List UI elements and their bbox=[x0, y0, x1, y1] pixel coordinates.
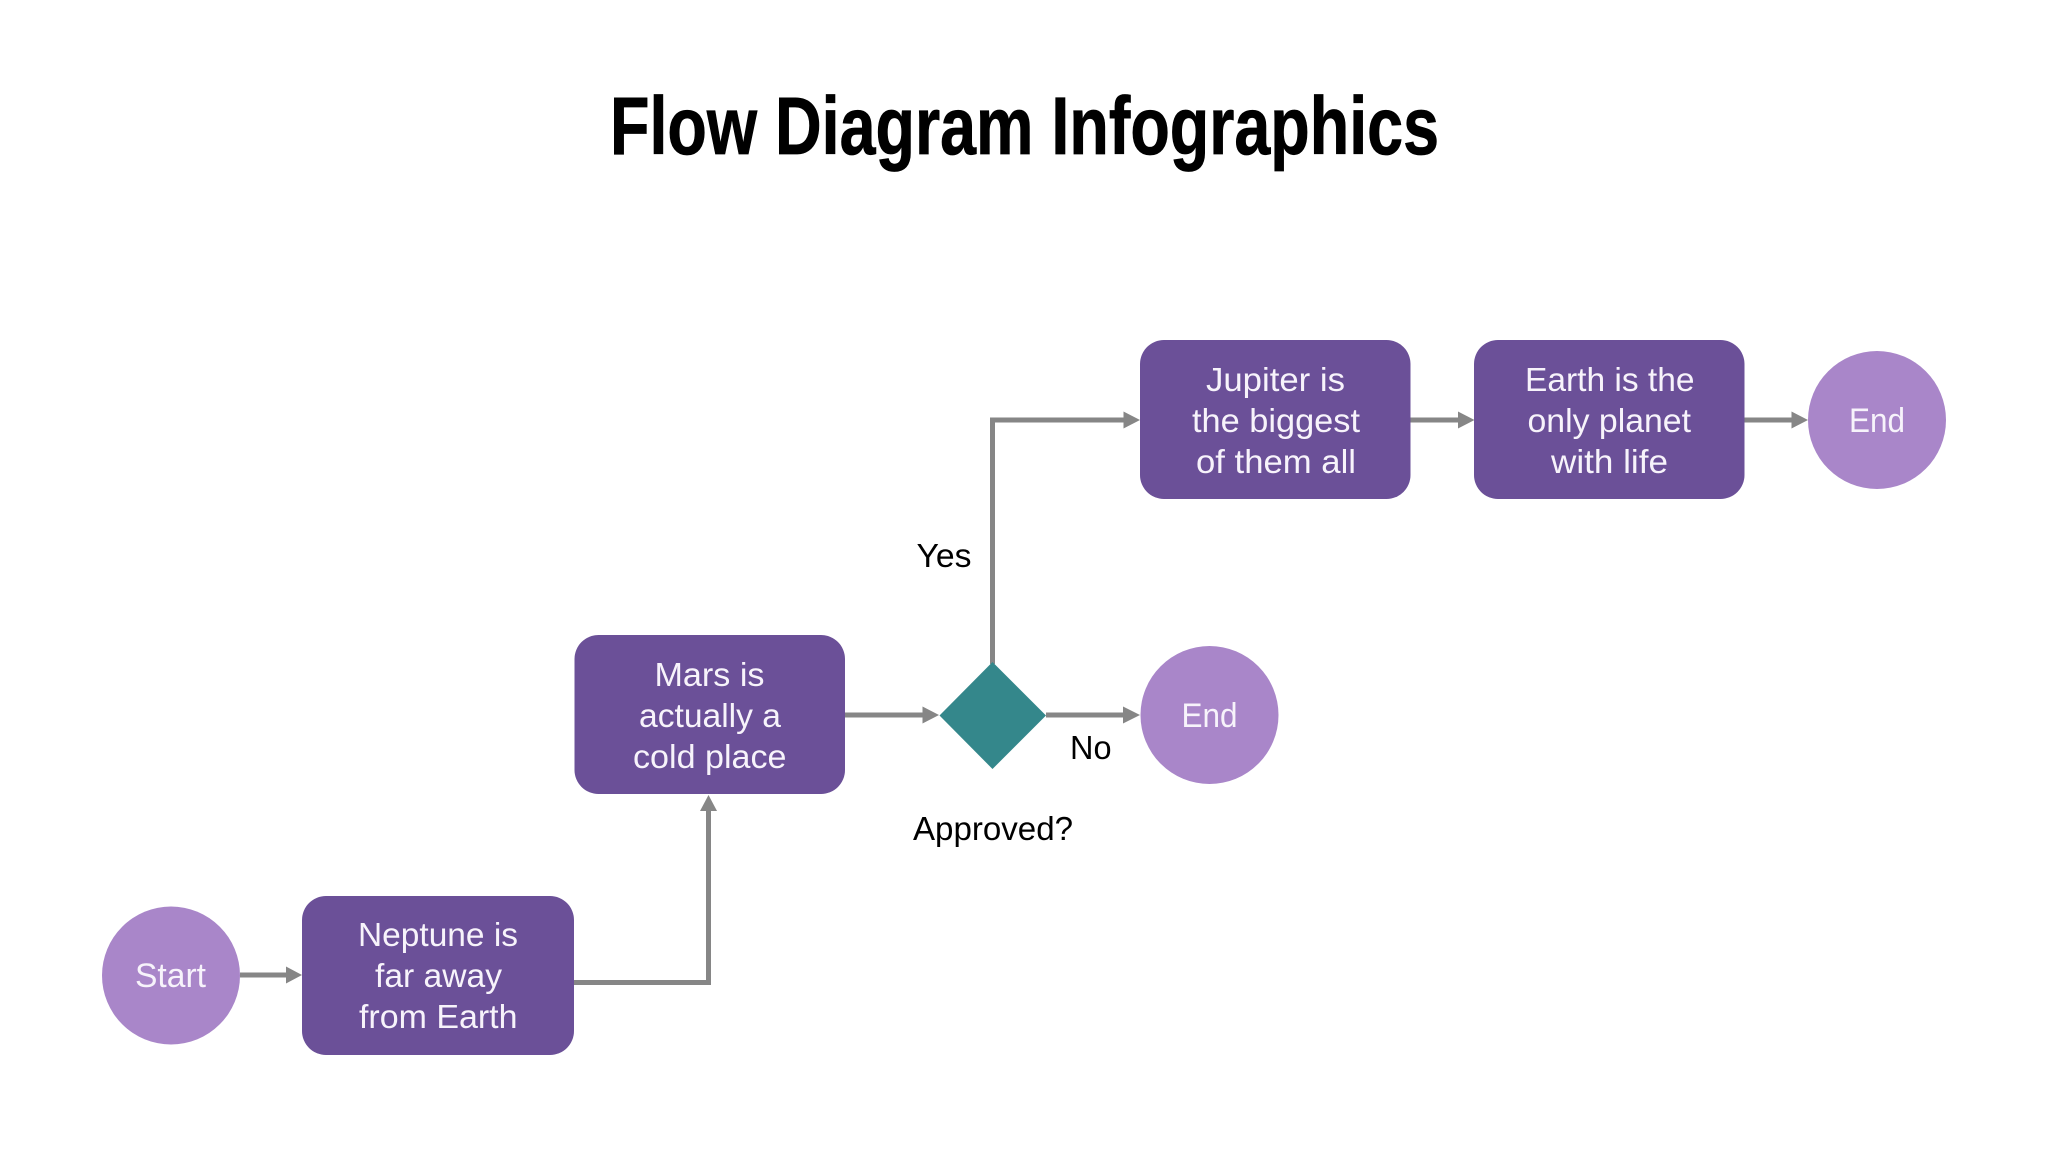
node: End (Yes branch) bbox=[1808, 351, 1946, 489]
box: Jupiter: Jupiter is bbox=[1206, 361, 1345, 398]
box: Neptune: Neptune is bbox=[358, 916, 518, 953]
node: End (No branch) bbox=[1140, 646, 1278, 784]
node: Start: Start bbox=[135, 957, 207, 995]
box: Earth: only planet bbox=[1528, 402, 1691, 439]
arrow: decision to End (No) bbox=[1046, 706, 1140, 724]
arrow: decision to Jupiter (Yes) bbox=[992, 412, 1140, 664]
box: Jupiter bbox=[1140, 340, 1410, 499]
arrow: Jupiter to Earth bbox=[1410, 412, 1474, 428]
arrow: start to Neptune bbox=[240, 966, 302, 984]
box: Mars: actually a bbox=[639, 697, 782, 734]
node: End (Yes branch): End bbox=[1849, 402, 1905, 440]
arrow: Earth to End bbox=[1744, 412, 1808, 428]
node: Start bbox=[102, 906, 240, 1044]
box: Mars: Mars is bbox=[654, 656, 764, 693]
label: Yes: Yes bbox=[916, 537, 972, 574]
label: No: No bbox=[1070, 729, 1112, 766]
decision diamond bbox=[940, 662, 1046, 769]
node: End (No branch): End bbox=[1182, 697, 1238, 735]
box: Mars: cold place bbox=[633, 738, 786, 775]
box: Earth bbox=[1474, 340, 1744, 499]
title: Flow Diagram Infographics bbox=[610, 81, 1439, 172]
box: Neptune: far away bbox=[375, 957, 503, 994]
arrow: Neptune to Mars bbox=[574, 795, 717, 982]
box: Neptune bbox=[302, 896, 574, 1055]
arrow: Mars to decision bbox=[845, 706, 939, 724]
box: Jupiter: of them all bbox=[1196, 443, 1356, 480]
box: Earth: with life bbox=[1550, 443, 1668, 480]
box: Mars bbox=[574, 635, 845, 794]
box: Neptune: from Earth bbox=[359, 998, 518, 1035]
box: Earth: Earth is the bbox=[1525, 361, 1694, 398]
label: Approved?: Approved? bbox=[913, 810, 1073, 847]
box: Jupiter: the biggest bbox=[1192, 402, 1360, 439]
